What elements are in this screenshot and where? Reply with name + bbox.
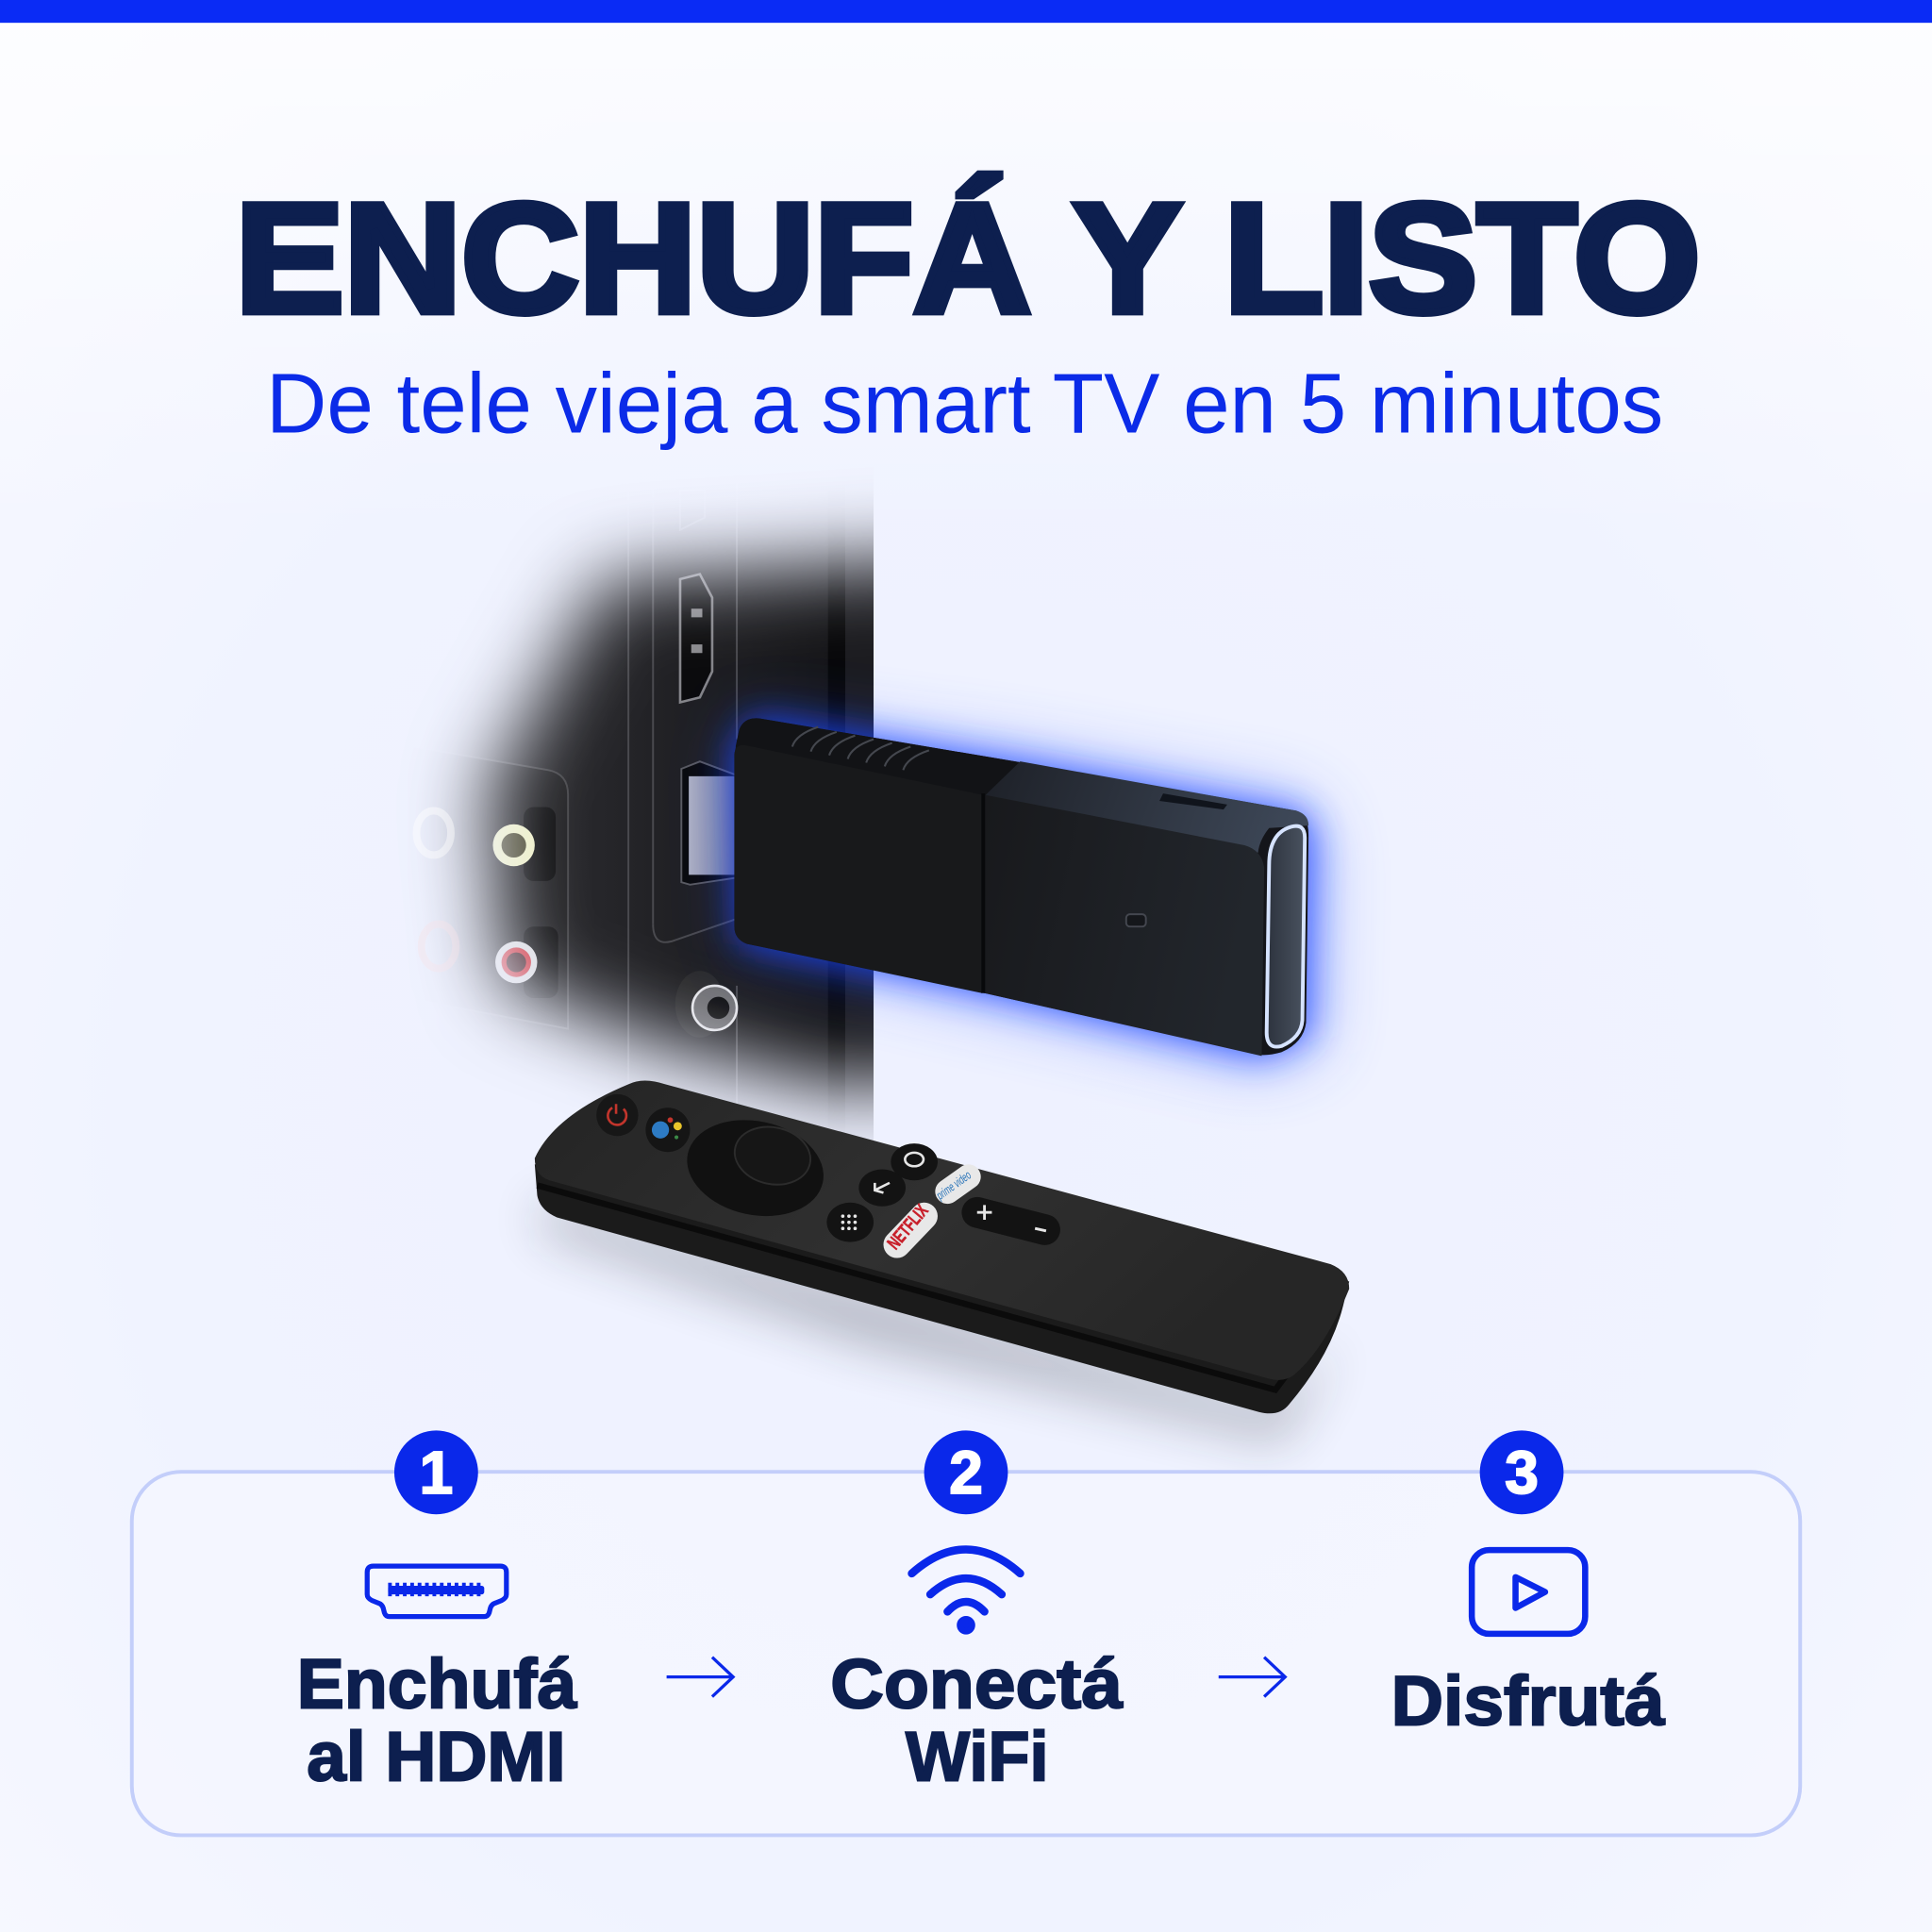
arrow 2 xyxy=(1219,1657,1285,1697)
stick wide blue haze xyxy=(734,717,1324,1070)
lower HDMI port xyxy=(681,761,740,885)
netflix button: NETFLIX xyxy=(884,1201,933,1254)
first body block top xyxy=(736,718,1023,798)
step 2 label: WiFi xyxy=(906,1717,1049,1795)
step 2 badge xyxy=(924,1430,1008,1514)
step 3 badge: 3 xyxy=(1505,1439,1539,1507)
stick blue glow xyxy=(734,717,1313,1058)
first body block xyxy=(734,745,982,993)
netflix button xyxy=(884,1201,933,1254)
RCA connector bay xyxy=(487,760,569,1030)
stick silhouette xyxy=(734,718,1308,1055)
second body block xyxy=(985,794,1264,1056)
panel grooves xyxy=(627,536,738,1100)
remote lower body xyxy=(535,1164,1349,1413)
step 3 label: Disfrutá xyxy=(1391,1662,1665,1740)
step 2 badge: 2 xyxy=(949,1439,983,1507)
end cap glowing ring xyxy=(1267,826,1305,1047)
step 1 label: al HDMI xyxy=(307,1717,566,1795)
LED indicator xyxy=(1126,914,1146,926)
apps button xyxy=(826,1203,874,1242)
upper HDMI port xyxy=(680,575,712,702)
HDMI plug xyxy=(689,776,738,874)
second body top surface xyxy=(982,761,1308,853)
step 3 badge xyxy=(1480,1430,1563,1514)
step 1 badge: 1 xyxy=(420,1439,453,1507)
TV back panel with ports xyxy=(425,495,874,1141)
prime button: prime video xyxy=(933,1168,974,1203)
back button xyxy=(858,1170,906,1207)
step 1 label xyxy=(297,1644,577,1795)
seam xyxy=(982,793,985,993)
RCA yellow jack xyxy=(492,808,556,881)
top accent bar xyxy=(0,0,1932,23)
D-pad ring xyxy=(678,1108,833,1228)
subtitle: De tele vieja a smart TV en 5 minutos xyxy=(266,356,1663,451)
USB slot xyxy=(1159,793,1227,809)
D-pad center xyxy=(729,1120,816,1191)
home button xyxy=(891,1143,938,1180)
steps panel xyxy=(132,1472,1800,1835)
audio jack xyxy=(675,971,737,1038)
HDMI pins xyxy=(691,608,702,653)
faded white jack rings xyxy=(416,810,456,969)
step 1 label: Enchufá xyxy=(297,1644,577,1723)
step 2 label xyxy=(830,1644,1124,1795)
step 1 badge xyxy=(394,1430,478,1514)
volume rocker xyxy=(977,1205,1046,1231)
remote shadow xyxy=(542,1201,1337,1441)
RCA red jack xyxy=(495,926,558,998)
vent ridges xyxy=(792,727,929,770)
icon: play xyxy=(1472,1550,1585,1634)
power button xyxy=(596,1094,639,1136)
remote top face xyxy=(535,1080,1349,1380)
prime button xyxy=(933,1168,974,1203)
assistant button xyxy=(645,1108,690,1152)
title: ENCHUFÁ Y LISTO xyxy=(235,171,1700,344)
faint top port xyxy=(680,491,705,530)
icon: HDMI xyxy=(367,1566,507,1617)
icon: WiFi xyxy=(912,1549,1020,1631)
remote seam xyxy=(537,1185,1338,1390)
streaming stick xyxy=(734,718,1308,1056)
arrow 1 xyxy=(667,1657,733,1697)
step 2 label: Conectá xyxy=(830,1644,1124,1723)
remote control xyxy=(535,1080,1349,1413)
